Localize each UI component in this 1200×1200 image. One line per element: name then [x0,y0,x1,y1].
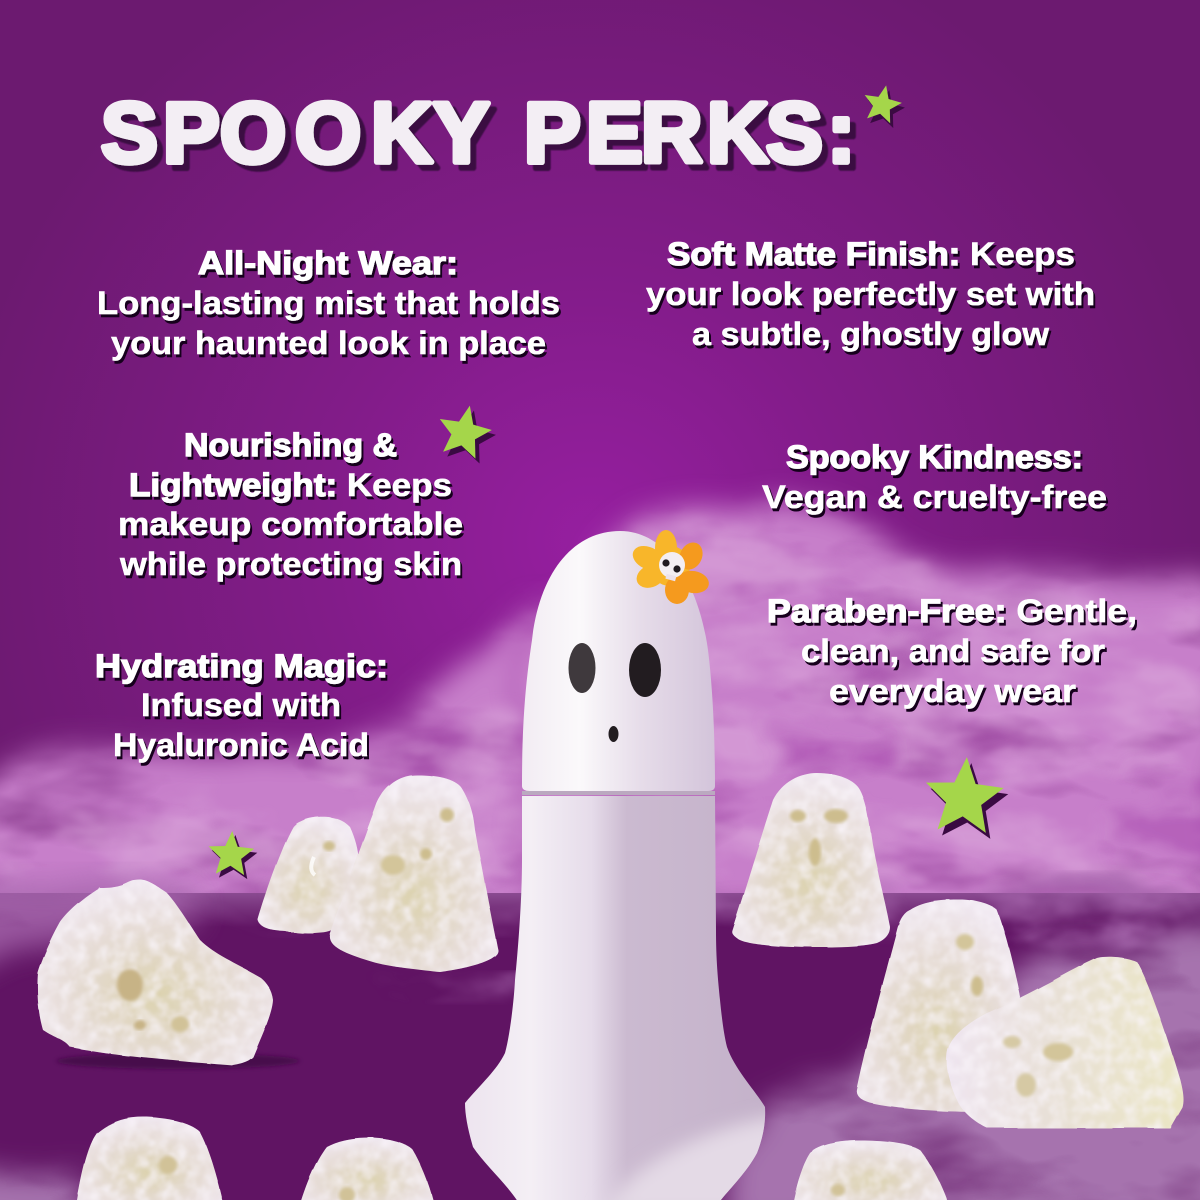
text block: soft matte finish: your look perfectly set with [646,276,1095,312]
star: beside title [859,81,909,130]
bottle base mist [612,1111,766,1200]
left eye [568,643,596,693]
star: upper left text [432,400,501,466]
floor mist [0,885,1200,1200]
bottle: white ghost mist spray [465,530,780,1200]
star: right side [922,754,1011,840]
text block: paraben-free: clean, and safe for [801,633,1105,669]
bottle body [465,796,765,1200]
heading and body: Soft Matte Finish: Keeps [667,236,1075,272]
text block: nourishing and lightweight [118,427,463,582]
clouds: pink smoke behind the scene [0,496,1200,930]
rock ghost: bottom center-left [300,1138,435,1200]
rock ghost: big tilted left [37,880,300,1069]
rock ghost: small back left [258,817,359,934]
text block: hydrating magic [95,648,388,763]
skull [659,552,685,578]
rock ghost: tilted far right [947,957,1183,1128]
floor: dark purple ground [0,893,1200,1200]
mouth [608,726,618,742]
heading: All-Night Wear: [198,245,458,281]
rock ghost: front right tall [857,900,1020,1112]
rock ghost: bottom right [793,1140,949,1200]
text block: all-night wear: your haunted look in place [111,325,546,361]
heading and body: Paraben-Free: Gentle, [767,593,1137,629]
text block: soft matte finish [646,236,1095,352]
body: Long-lasting mist that holds [97,285,560,321]
heading: Nourishing & [184,427,397,463]
text block: nourishing and lightweight: makeup comfortable [118,506,463,542]
text block: all-night wear [97,245,560,361]
rock ghost: bottom left [76,1117,224,1200]
text block: paraben-free [767,593,1137,709]
right eye [629,643,661,697]
rock ghost: back right [732,773,890,947]
heading: Hydrating Magic: [95,648,388,684]
star: lower left [207,830,258,880]
text block: nourishing and lightweight: while protecting skin [119,546,462,582]
heading: Spooky Kindness: [786,439,1083,475]
text block: hydrating magic: Hyaluronic Acid [113,727,369,763]
text block: spooky kindness [762,439,1107,515]
cap seam [522,791,715,795]
ghost rocks: mochi ghost figures [37,773,1183,1200]
body: Vegan & cruelty-free [762,479,1107,515]
bottle cap [522,531,715,791]
rock ghost: tall back left [330,775,498,972]
text block: paraben-free: everyday wear [829,673,1076,709]
text block: soft matte finish: a subtle, ghostly glow [692,316,1049,352]
body: Infused with [141,687,341,723]
flower with skull [629,530,711,604]
title: SPOOKY PERKS: [101,86,855,181]
heading and body: Lightweight: Keeps [129,467,452,503]
